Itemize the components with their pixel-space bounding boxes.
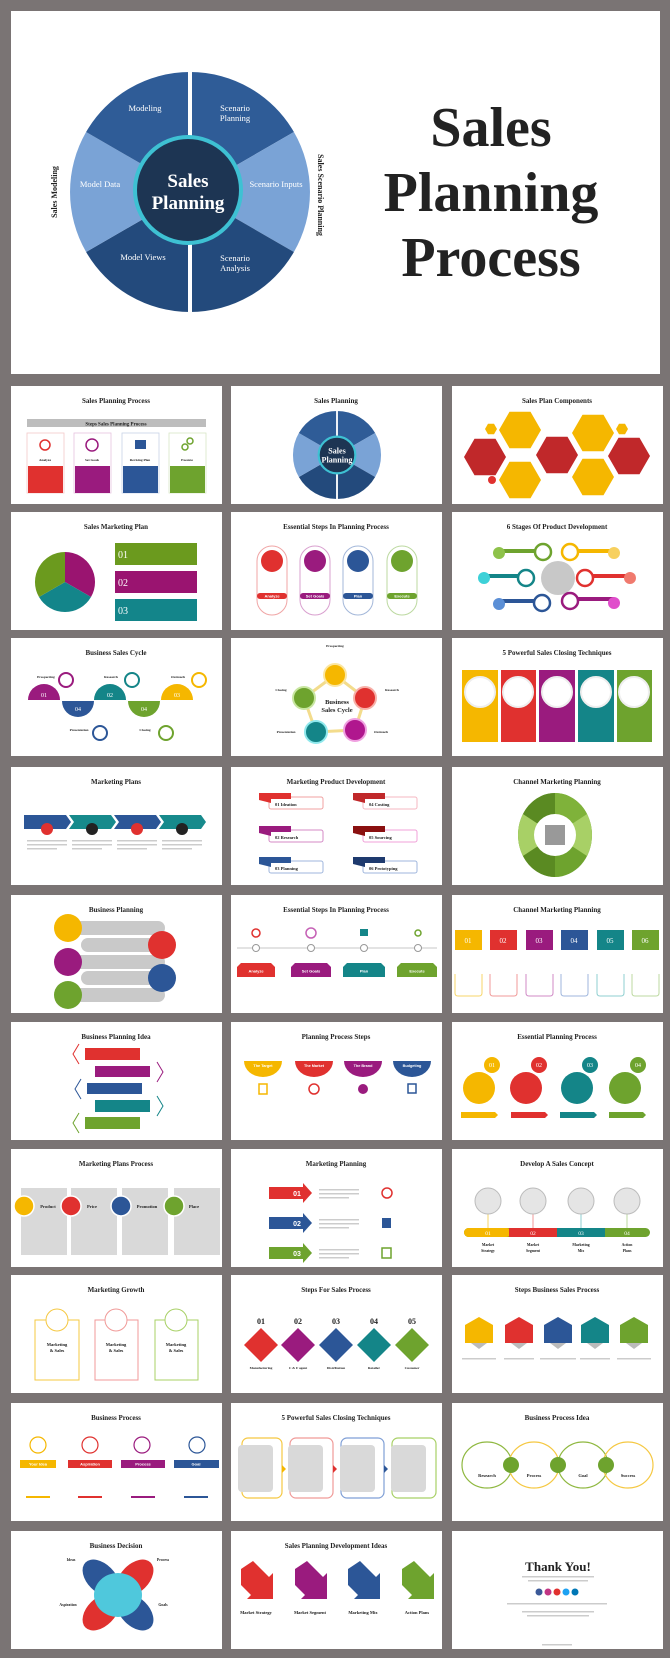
slide 19: Marketing Plans Process: Promotion [137,1204,158,1209]
slide 18: Essential Planning Process: 04 [635,1063,641,1069]
slide 15: Channel Marketing Planning tags: 03 [536,937,543,945]
slide 21: Develop A Sales Concept: Market [482,1243,495,1247]
slide 16: Business Planning Idea [11,1022,222,1140]
slide 4: Sales Marketing Plan [11,512,222,630]
slide 23: Steps For Sales Process: Distribution [327,1366,345,1370]
slide 5: Essential Steps In Planning Process: Execute [394,594,410,598]
slide 5: Essential Steps In Planning Process: Plan [354,594,363,598]
slide 12: Channel Marketing Planning ring: Channel Marketing Planning [513,778,601,786]
slide 15: Channel Marketing Planning tags: 06 [642,937,649,945]
slide 21: Develop A Sales Concept: 04 [624,1231,630,1237]
slide 21: Develop A Sales Concept: Segment [526,1249,541,1253]
slide 3: Sales Plan Components: Sales Plan Components [522,397,592,405]
slide 7: Business Sales Cycle wave: 01 [41,693,47,699]
slide 20: Marketing Planning arrows [231,1149,442,1267]
slide 11: Marketing Product Development: 06 Prototyping [369,866,398,871]
slide 14: Essential Steps timeline: Essential Steps In Planning Process [283,906,389,914]
slide 5: Essential Steps In Planning Process: Essential Steps In Planning Process [283,523,389,531]
slide 8: Business Sales Cycle star: Sales Cycle [321,707,353,714]
slide 23: Steps For Sales Process: Customer [405,1366,420,1370]
slide 19: Marketing Plans Process: Product [40,1204,56,1209]
slide 11: Marketing Product Development: 03 Planning [275,866,299,871]
slide 13: Business Planning: Business Planning [89,906,144,914]
slide 14: Essential Steps timeline: Set Goals [302,968,321,974]
slide 1: Sales Planning Process: Steps Sales Planning Process [85,422,147,428]
slide 29: Sales Planning Development Ideas: Market Segment [294,1610,327,1615]
slide 28: Business Decision: Business Decision [90,1542,142,1550]
slide 21: Develop A Sales Concept: Strategy [481,1249,495,1253]
slide 1: Sales Planning Process: Revising Plan [130,458,150,462]
slide 4: Sales Marketing Plan: 02 [118,578,128,589]
slide 22: Marketing Growth: & Sales [169,1348,184,1353]
hero wheel chart: Model Views [120,252,166,262]
hero slide [11,11,660,374]
slide 8: Business Sales Cycle star: Presentation [277,730,295,734]
slide 3: Sales Plan Components [452,386,663,504]
slide 19: Marketing Plans Process: Marketing Plans Process [79,1160,153,1168]
slide 27: Business Process Idea: Goal [578,1473,588,1478]
slide 21: Develop A Sales Concept: Market [527,1243,540,1247]
slide 25: Business Process: Process [135,1462,152,1466]
slide 18: Essential Planning Process: 03 [587,1063,593,1069]
slide 12: Channel Marketing Planning ring [452,767,663,885]
slide 28: Business Decision: Process [157,1558,170,1562]
slide 22: Marketing Growth: Marketing [166,1342,187,1347]
slide 4: Sales Marketing Plan: Sales Marketing Plan [84,523,148,531]
slide 22: Marketing Growth: & Sales [109,1348,124,1353]
slide 23: Steps For Sales Process: 03 [332,1317,340,1326]
slide 22: Marketing Growth: & Sales [50,1348,65,1353]
slide 1: Sales Planning Process: Sales Planning Process [82,397,150,405]
slide 29: Sales Planning Development Ideas: Action Plans [405,1610,429,1615]
hero wheel chart: Planning [220,113,251,123]
hero wheel chart: Scenario Inputs [249,179,303,189]
slide 23: Steps For Sales Process: 01 [257,1317,265,1326]
slide 1: Sales Planning Process: Set Goals [85,458,100,462]
slide 5: Essential Steps In Planning Process: Set Goals [306,594,325,598]
slide 22: Marketing Growth: Marketing Growth [88,1286,145,1294]
hero title [384,97,598,289]
slide 21: Develop A Sales Concept: Develop A Sales Concept [520,1160,595,1168]
slide 7: Business Sales Cycle wave: Closing [139,728,151,732]
slide 15: Channel Marketing Planning tags [452,895,663,1013]
hero wheel chart: Modeling [128,103,162,113]
slide 11: Marketing Product Development: 04 Costing [369,802,390,807]
slide 27: Business Process Idea: Research [478,1473,496,1478]
hero wheel chart: Sales Scenario Planning [316,154,325,236]
slide 10: Marketing Plans: Marketing Plans [91,778,141,786]
slide 7: Business Sales Cycle wave: Prospecting [37,675,55,679]
slide 8: Business Sales Cycle star [231,638,442,756]
slide 16: Business Planning Idea: Business Planning Idea [81,1033,151,1041]
slide 4: Sales Marketing Plan: 01 [118,550,128,561]
slide 21: Develop A Sales Concept: Marketing [572,1243,590,1247]
slide 26: 5 Powerful Sales Closing Techniques boxes: 5 Powerful Sales Closing Techniques [282,1414,391,1422]
slide 15: Channel Marketing Planning tags: 02 [500,937,507,945]
slide 23: Steps For Sales Process: Steps For Sales Process [301,1286,371,1294]
slide 21: Develop A Sales Concept [452,1149,663,1267]
slide 7: Business Sales Cycle wave [11,638,222,756]
slide 14: Essential Steps timeline [231,895,442,1013]
slide 7: Business Sales Cycle wave: Outreach [171,675,185,679]
slide 20: Marketing Planning arrows: 02 [293,1221,301,1228]
slide 23: Steps For Sales Process: Manufacturing [250,1366,273,1370]
slide 21: Develop A Sales Concept: Action [622,1243,633,1247]
slide 21: Develop A Sales Concept: Mix [578,1249,584,1253]
slide 28: Business Decision: Ideas [67,1558,76,1562]
slide 1: Sales Planning Process: Execute [181,458,193,462]
slide 25: Business Process: Goal [192,1462,200,1466]
slide 6: 6 Stages Of Product Development: 6 Stages Of Product Development [507,523,608,531]
slide 23: Steps For Sales Process: C & F agent [289,1366,308,1370]
slide 29: Sales Planning Development Ideas: Marketing Mix [348,1610,378,1615]
slide 2: Sales Planning wheel: Sales Planning [314,397,358,405]
slide 11: Marketing Product Development: 02 Research [275,835,299,840]
slide 23: Steps For Sales Process: 02 [294,1317,302,1326]
slide 17: Planning Process Steps: Planning Process Steps [302,1033,371,1041]
slide 28: Business Decision [11,1531,222,1649]
slide 14: Essential Steps timeline: Execute [409,968,425,974]
slide 22: Marketing Growth: Marketing [47,1342,68,1347]
slide 7: Business Sales Cycle wave: 03 [174,693,180,699]
slide 18: Essential Planning Process [452,1022,663,1140]
slide 2: Sales Planning wheel: Planning [322,455,352,464]
slide 17: Planning Process Steps: Budgeting [403,1064,422,1068]
slide 27: Business Process Idea: Process [527,1473,541,1478]
slide 20: Marketing Planning arrows: 01 [293,1191,301,1198]
slide 15: Channel Marketing Planning tags: Channel Marketing Planning [513,906,601,914]
slide 29: Sales Planning Development Ideas: Market Strategy [240,1610,273,1615]
hero wheel chart: Analysis [220,263,250,273]
slide 8: Business Sales Cycle star: Closing [275,688,287,692]
slide 17: Planning Process Steps: The Brand [354,1064,373,1068]
slide 20: Marketing Planning arrows: Marketing Planning [306,1160,367,1168]
slide 7: Business Sales Cycle wave: Business Sales Cycle [85,649,147,657]
slide 21: Develop A Sales Concept: 03 [578,1231,584,1237]
slide 8: Business Sales Cycle star: Business [325,699,349,706]
slide 24: Steps Business Sales Process: Steps Business Sales Process [515,1286,600,1294]
slide 18: Essential Planning Process: Essential Planning Process [517,1033,597,1041]
slide 17: Planning Process Steps: The Market [304,1064,325,1068]
slide 27: Business Process Idea: Success [621,1473,635,1478]
slide 7: Business Sales Cycle wave: Presentation [70,728,88,732]
slide 9: 5 Powerful Sales Closing Techniques [452,638,663,756]
slide 30: Thank You [452,1531,663,1649]
slide 5: Essential Steps In Planning Process: Analyze [264,594,280,598]
slide 19: Marketing Plans Process [11,1149,222,1267]
slide 20: Marketing Planning arrows: 03 [293,1251,301,1258]
slide 7: Business Sales Cycle wave: 04 [141,707,147,713]
slide 25: Business Process: Aspiration [80,1462,100,1466]
slide 21: Develop A Sales Concept: 02 [530,1231,536,1237]
hero wheel chart: Planning [152,193,225,214]
slide 30: Thank You: Thank You! [525,1559,591,1574]
slide 11: Marketing Product Development [231,767,442,885]
slide 23: Steps For Sales Process: Retailer [368,1366,380,1370]
slide 15: Channel Marketing Planning tags: 01 [464,937,472,945]
hero title: Process [401,227,581,289]
slide 11: Marketing Product Development: 01 Ideation [275,802,297,807]
slide 15: Channel Marketing Planning tags: 05 [606,937,614,945]
slide 6: 6 Stages Of Product Development [452,512,663,630]
hero wheel chart: Model Data [80,179,120,189]
slide 21: Develop A Sales Concept: Plans [623,1249,632,1253]
slide 8: Business Sales Cycle star: Prospecting [326,644,344,648]
slide 23: Steps For Sales Process [231,1275,442,1393]
slide 29: Sales Planning Development Ideas [231,1531,442,1649]
slide 10: Marketing Plans [11,767,222,885]
hero wheel chart: Scenario [220,103,250,113]
slide 24: Steps Business Sales Process [452,1275,663,1393]
slide 7: Business Sales Cycle wave: 02 [107,693,113,699]
slide 25: Business Process: Your Idea [29,1462,48,1466]
slide 17: Planning Process Steps [231,1022,442,1140]
slide 11: Marketing Product Development: 05 Sourcing [369,835,393,840]
hero title: Planning [384,162,598,224]
slide 8: Business Sales Cycle star: Outreach [374,730,388,734]
slide 19: Marketing Plans Process: Place [189,1204,199,1209]
slide 25: Business Process [11,1403,222,1521]
slide 14: Essential Steps timeline: Plan [360,968,369,974]
hero wheel chart [50,70,325,314]
slide 23: Steps For Sales Process: 05 [408,1317,416,1326]
slide 8: Business Sales Cycle star: Research [385,688,399,692]
slide 13: Business Planning [11,895,222,1013]
slide 14: Essential Steps timeline: Analyze [248,968,264,974]
slide 22: Marketing Growth [11,1275,222,1393]
slide 7: Business Sales Cycle wave: 04 [75,707,81,713]
slide 5: Essential Steps In Planning Process [231,512,442,630]
hero wheel chart: Sales Modeling [50,166,59,218]
hero wheel chart: Sales [167,171,209,192]
slide 21: Develop A Sales Concept: 01 [485,1231,491,1237]
slide 23: Steps For Sales Process: 04 [370,1317,378,1326]
slide 11: Marketing Product Development: Marketing Product Development [287,778,386,786]
slide 15: Channel Marketing Planning tags: 04 [570,937,578,945]
slide 25: Business Process: Business Process [91,1414,141,1422]
slide 2: Sales Planning wheel [231,386,442,504]
slide 19: Marketing Plans Process: Price [87,1204,97,1209]
slide 7: Business Sales Cycle wave: Research [104,675,118,679]
slide 29: Sales Planning Development Ideas: Sales Planning Development Ideas [285,1542,388,1550]
slide 22: Marketing Growth: Marketing [106,1342,127,1347]
slide 17: Planning Process Steps: The Target [253,1064,273,1068]
slide 28: Business Decision: Aspiration [59,1603,78,1607]
slide 18: Essential Planning Process: 02 [536,1063,542,1069]
slide 1: Sales Planning Process [11,386,222,504]
slide 2: Sales Planning wheel: Sales [328,447,346,456]
slide 4: Sales Marketing Plan: 03 [118,606,128,617]
slide 1: Sales Planning Process: Analyze [39,458,51,462]
slide 26: 5 Powerful Sales Closing Techniques boxes [231,1403,442,1521]
hero wheel chart: Scenario [220,253,250,263]
slide 18: Essential Planning Process: 01 [489,1063,495,1069]
slide 28: Business Decision: Goals [158,1603,168,1607]
hero title: Sales [430,97,552,159]
slide 27: Business Process Idea: Business Process Idea [525,1414,590,1422]
slide 27: Business Process Idea [452,1403,663,1521]
slide 9: 5 Powerful Sales Closing Techniques: 5 Powerful Sales Closing Techniques [503,649,612,657]
